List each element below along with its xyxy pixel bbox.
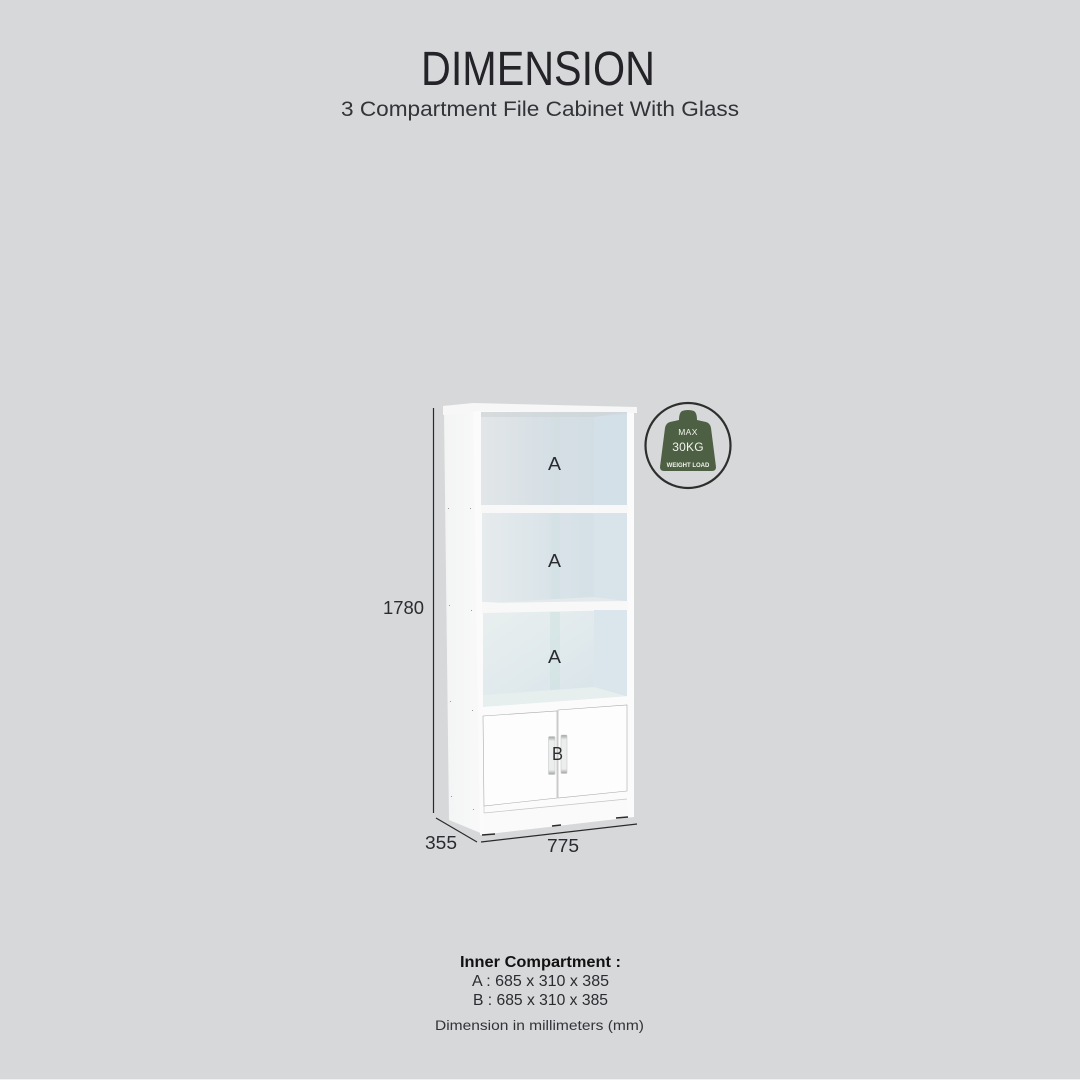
left side panel	[444, 410, 483, 834]
inner compartment notes	[435, 954, 644, 1033]
badge text: WEIGHT LOAD	[667, 463, 710, 469]
compartment labels: A	[548, 647, 561, 667]
shelf 3	[483, 696, 628, 715]
compartment B size: B : 685 x 310 x 385	[473, 992, 608, 1009]
door handles	[548, 735, 567, 774]
compartment labels: B	[552, 744, 563, 764]
compartment 3	[483, 610, 627, 707]
max weight badge	[646, 403, 730, 488]
plinth	[484, 799, 628, 834]
compartment 1	[481, 412, 627, 505]
compartment labels	[548, 454, 563, 764]
side panel screw dots	[448, 508, 474, 810]
depth dimension line	[436, 818, 477, 842]
subtitle: 3 Compartment File Cabinet With Glass	[341, 97, 739, 121]
badge text: MAX	[678, 427, 698, 437]
front frame	[473, 410, 634, 835]
top board	[443, 403, 637, 415]
feet	[482, 817, 628, 835]
badge text	[667, 427, 710, 469]
cabinet illustration	[443, 403, 637, 835]
badge ring	[646, 403, 730, 488]
icon: weight	[660, 410, 716, 471]
left door	[483, 711, 557, 806]
right door	[558, 705, 627, 798]
units note: Dimension in millimeters (mm)	[435, 1018, 644, 1033]
badge text: 30KG	[672, 440, 704, 454]
width label: 775	[547, 835, 579, 856]
height dimension line	[432, 408, 434, 813]
height label: 1780	[383, 597, 424, 618]
compartment 2	[482, 513, 627, 605]
compartment A size: A : 685 x 310 x 385	[472, 973, 609, 990]
title: DIMENSION	[421, 43, 655, 96]
shelf 2	[482, 601, 628, 614]
width dimension line	[481, 824, 637, 842]
compartment labels: A	[548, 551, 561, 571]
notes heading: Inner Compartment :	[460, 954, 621, 971]
shelf 1	[481, 505, 628, 513]
compartment labels: A	[548, 454, 561, 474]
depth label: 355	[425, 832, 457, 853]
